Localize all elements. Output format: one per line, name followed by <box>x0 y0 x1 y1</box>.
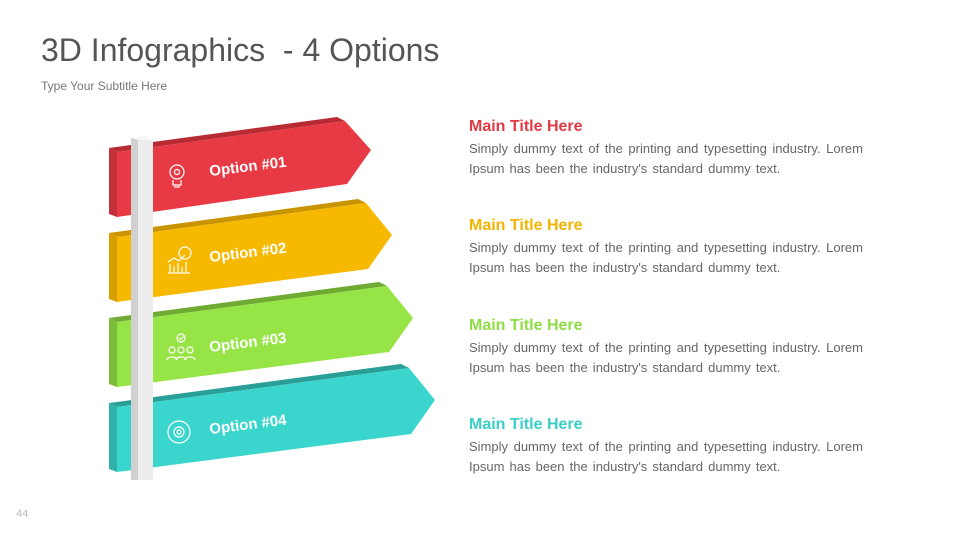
text block 3: Ipsum has been the industry's standard dummy text. <box>469 360 780 375</box>
subtitle: Type Your Subtitle Here <box>41 79 167 93</box>
text block 4: Ipsum has been the industry's standard dummy text. <box>469 459 780 474</box>
labels: Option #03 <box>208 330 287 356</box>
pole <box>131 135 153 480</box>
text block 3: Main Title Here <box>469 317 583 334</box>
text block 4: Main Title Here <box>469 416 583 433</box>
text block 3 <box>469 317 863 375</box>
text block 4 <box>469 416 863 474</box>
sign 3 <box>109 282 413 387</box>
title: 3D Infographics - 4 Options <box>41 32 439 68</box>
text block 2: Ipsum has been the industry's standard dummy text. <box>469 260 780 275</box>
sign 1 <box>109 117 371 217</box>
labels: Option #02 <box>208 240 287 266</box>
text block 1: Simply dummy text of the printing and typesetting industry. Lorem <box>469 141 863 156</box>
text block 1 <box>469 118 863 176</box>
text block 4: Simply dummy text of the printing and typesetting industry. Lorem <box>469 439 863 454</box>
text block 2: Simply dummy text of the printing and typesetting industry. Lorem <box>469 240 863 255</box>
sign 4 <box>109 364 435 472</box>
text block 1: Main Title Here <box>469 118 583 135</box>
page number: 44 <box>16 508 28 520</box>
text block 2 <box>469 217 863 275</box>
text block 2: Main Title Here <box>469 217 583 234</box>
sign 2 <box>109 199 392 302</box>
icons <box>167 165 195 443</box>
labels: Option #04 <box>208 412 288 438</box>
text block 1: Ipsum has been the industry's standard dummy text. <box>469 161 780 176</box>
labels: Option #01 <box>208 154 287 180</box>
labels <box>208 154 288 438</box>
text block 3: Simply dummy text of the printing and typesetting industry. Lorem <box>469 340 863 355</box>
